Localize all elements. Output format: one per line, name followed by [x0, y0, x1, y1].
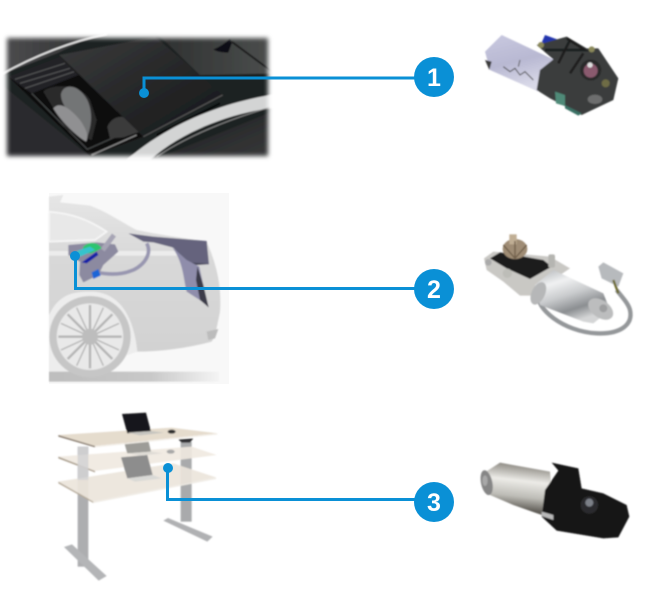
wheel [49, 296, 131, 377]
panel: height adjustable desk [58, 413, 217, 581]
ground shadow [49, 372, 219, 382]
panel: car sunroof photo [0, 30, 277, 163]
connector 1: sunroof to badge [139, 78, 416, 98]
badge 1 [414, 57, 454, 97]
bottom desk top [58, 463, 216, 502]
badge 3 [414, 482, 454, 522]
front leg [78, 447, 88, 567]
badge 2 [414, 269, 454, 309]
hinge mechanism [68, 242, 118, 282]
panel: desk motor [478, 463, 629, 538]
laptop lower [121, 455, 153, 478]
connector 2: trunk to badge [70, 251, 416, 288]
badge 2: 2 [427, 276, 441, 304]
sliding glass panel [60, 38, 192, 136]
lower white body band [127, 94, 277, 160]
middle desk top [58, 447, 217, 471]
motor can [535, 270, 610, 323]
wire [538, 290, 631, 333]
laptop top [122, 413, 151, 433]
top desk top [58, 428, 217, 446]
car body [49, 195, 220, 352]
white roof edge [0, 34, 107, 75]
badge 3: 3 [427, 489, 441, 517]
panel: car rear with trunk mechanism [49, 193, 229, 384]
gear [503, 239, 527, 259]
seat [43, 86, 97, 140]
connector [598, 262, 623, 287]
rear leg [181, 442, 192, 522]
panel: sunroof motor [485, 35, 618, 116]
connector 3: desk to badge [163, 463, 416, 500]
badge 1: 1 [427, 64, 441, 92]
panel: trunk motor [484, 234, 631, 333]
laptop middle [122, 433, 151, 453]
antenna [213, 38, 232, 53]
trunk lid frame [97, 243, 149, 274]
sunroof opening [12, 74, 142, 155]
